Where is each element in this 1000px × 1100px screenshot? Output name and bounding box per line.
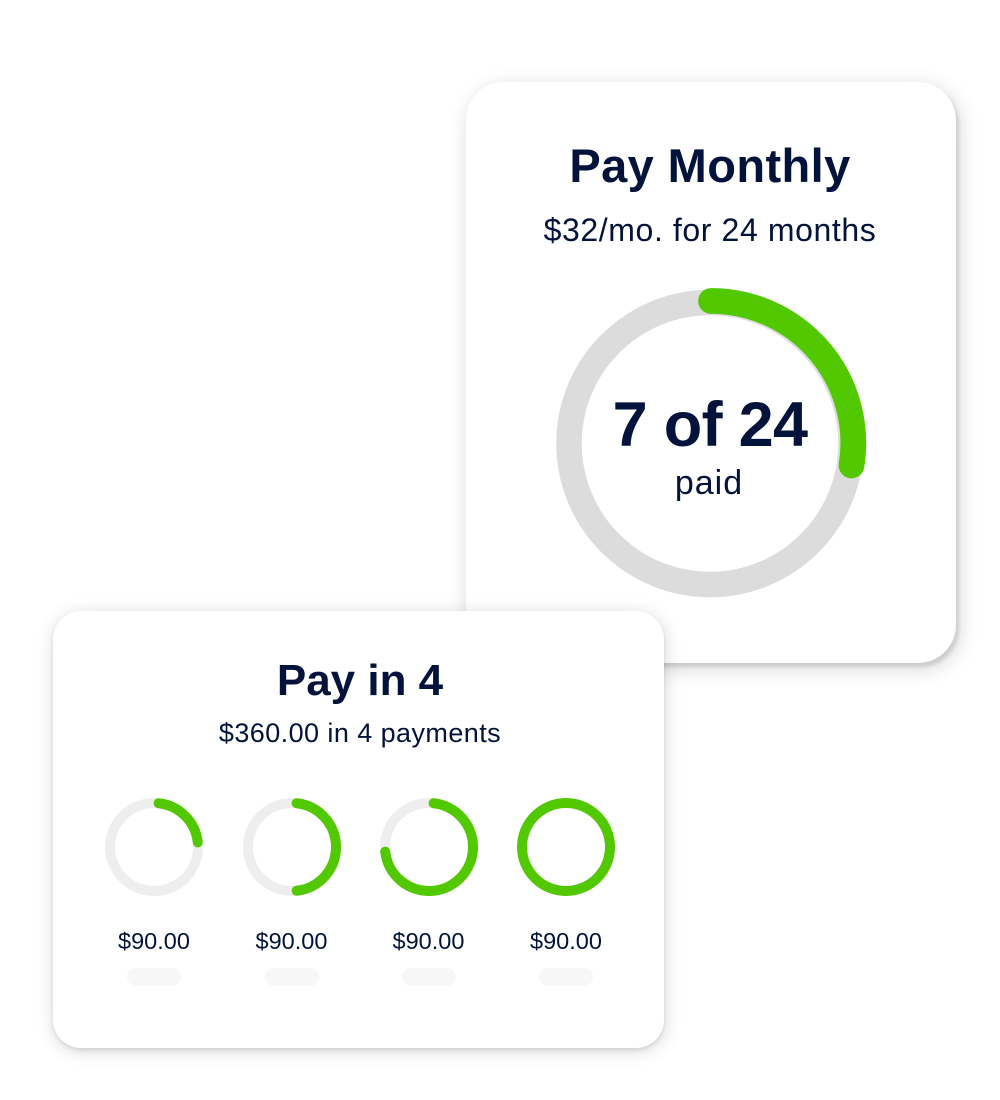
amount: $90.00: [256, 928, 327, 954]
payment 4: [517, 798, 615, 954]
amount: $90.00: [393, 928, 464, 954]
ring: half paid: [243, 798, 341, 896]
payment 3: [380, 798, 478, 954]
panel: Pay in 4 card: [53, 611, 664, 1048]
payment 2: [243, 798, 341, 954]
chart: monthly progress ring: [556, 288, 866, 598]
ring label: paid: paid: [675, 464, 743, 502]
placeholder pill: [402, 968, 456, 986]
payment 1: [105, 798, 203, 954]
heading: Pay in 4: Pay in 4: [277, 656, 443, 705]
placeholder pill: [264, 968, 318, 986]
ring: fully paid: [517, 798, 615, 896]
amount: $90.00: [530, 928, 602, 954]
amount: $90.00: [118, 928, 190, 954]
heading: Pay Monthly: Pay Monthly: [569, 139, 851, 192]
placeholder pill: [127, 968, 181, 986]
subheading: monthly price: $32/mo. for 24 months: [544, 212, 876, 248]
ring: one quarter paid: [105, 798, 203, 896]
panel: Pay Monthly card: [466, 82, 956, 663]
ring value: 7 of 24: 7 of 24: [613, 390, 807, 460]
placeholder pill: [539, 968, 593, 986]
ring: three quarters paid: [380, 798, 478, 896]
subheading: total payments: $360.00 in 4 payments: [219, 718, 501, 748]
